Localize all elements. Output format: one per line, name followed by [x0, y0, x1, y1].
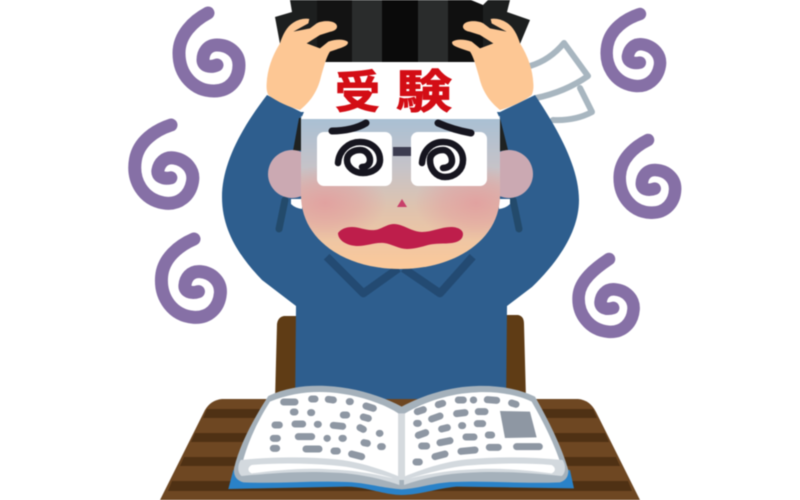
book right page edge highlight — [410, 464, 555, 478]
book outline — [234, 386, 568, 489]
book left page edges — [238, 457, 399, 485]
left lens — [317, 132, 392, 186]
book left page edge highlight — [248, 464, 393, 478]
left ear — [268, 150, 316, 198]
book picture box — [500, 411, 537, 438]
headband straps behind head — [293, 118, 508, 152]
book left page — [242, 392, 398, 477]
swirl: left middle — [129, 120, 202, 207]
headband ties — [279, 200, 519, 229]
right cheek blush — [427, 174, 500, 233]
collar — [327, 257, 473, 293]
book right page text marks — [416, 400, 539, 462]
headband kanji: ken: 験 — [396, 67, 452, 118]
right ear — [485, 150, 533, 198]
swirl: right top — [601, 9, 668, 90]
book right page edges — [404, 457, 565, 485]
left eyebrow — [332, 123, 366, 131]
hair — [275, 0, 530, 64]
chair — [275, 315, 526, 400]
book blue cover — [228, 470, 574, 495]
left spiral eye — [338, 142, 380, 173]
sweater body and arms — [222, 95, 579, 412]
mouth — [338, 224, 463, 249]
right hand — [452, 19, 533, 110]
right lens — [411, 132, 487, 186]
nose — [397, 199, 407, 207]
swirl: right middle — [619, 139, 677, 214]
swirl: left top — [179, 13, 239, 91]
book left page text marks — [273, 399, 382, 457]
headband kanji: juken: 受 — [335, 67, 380, 118]
right eyebrow — [438, 123, 471, 133]
glasses bridge — [393, 147, 411, 156]
book gutter — [398, 413, 405, 480]
book right page — [405, 392, 562, 477]
headband — [301, 62, 500, 119]
swirl: left bottom — [158, 236, 225, 319]
face — [301, 116, 500, 269]
illustration: stressed exam student — [128, 0, 682, 500]
flying papers — [530, 43, 592, 120]
left cheek blush — [301, 173, 374, 233]
open book — [228, 386, 574, 495]
right spiral eye — [422, 142, 463, 177]
desk — [160, 399, 640, 500]
swirl: right bottom — [576, 257, 638, 334]
white collar gaps — [291, 199, 510, 209]
left hand — [267, 19, 348, 110]
